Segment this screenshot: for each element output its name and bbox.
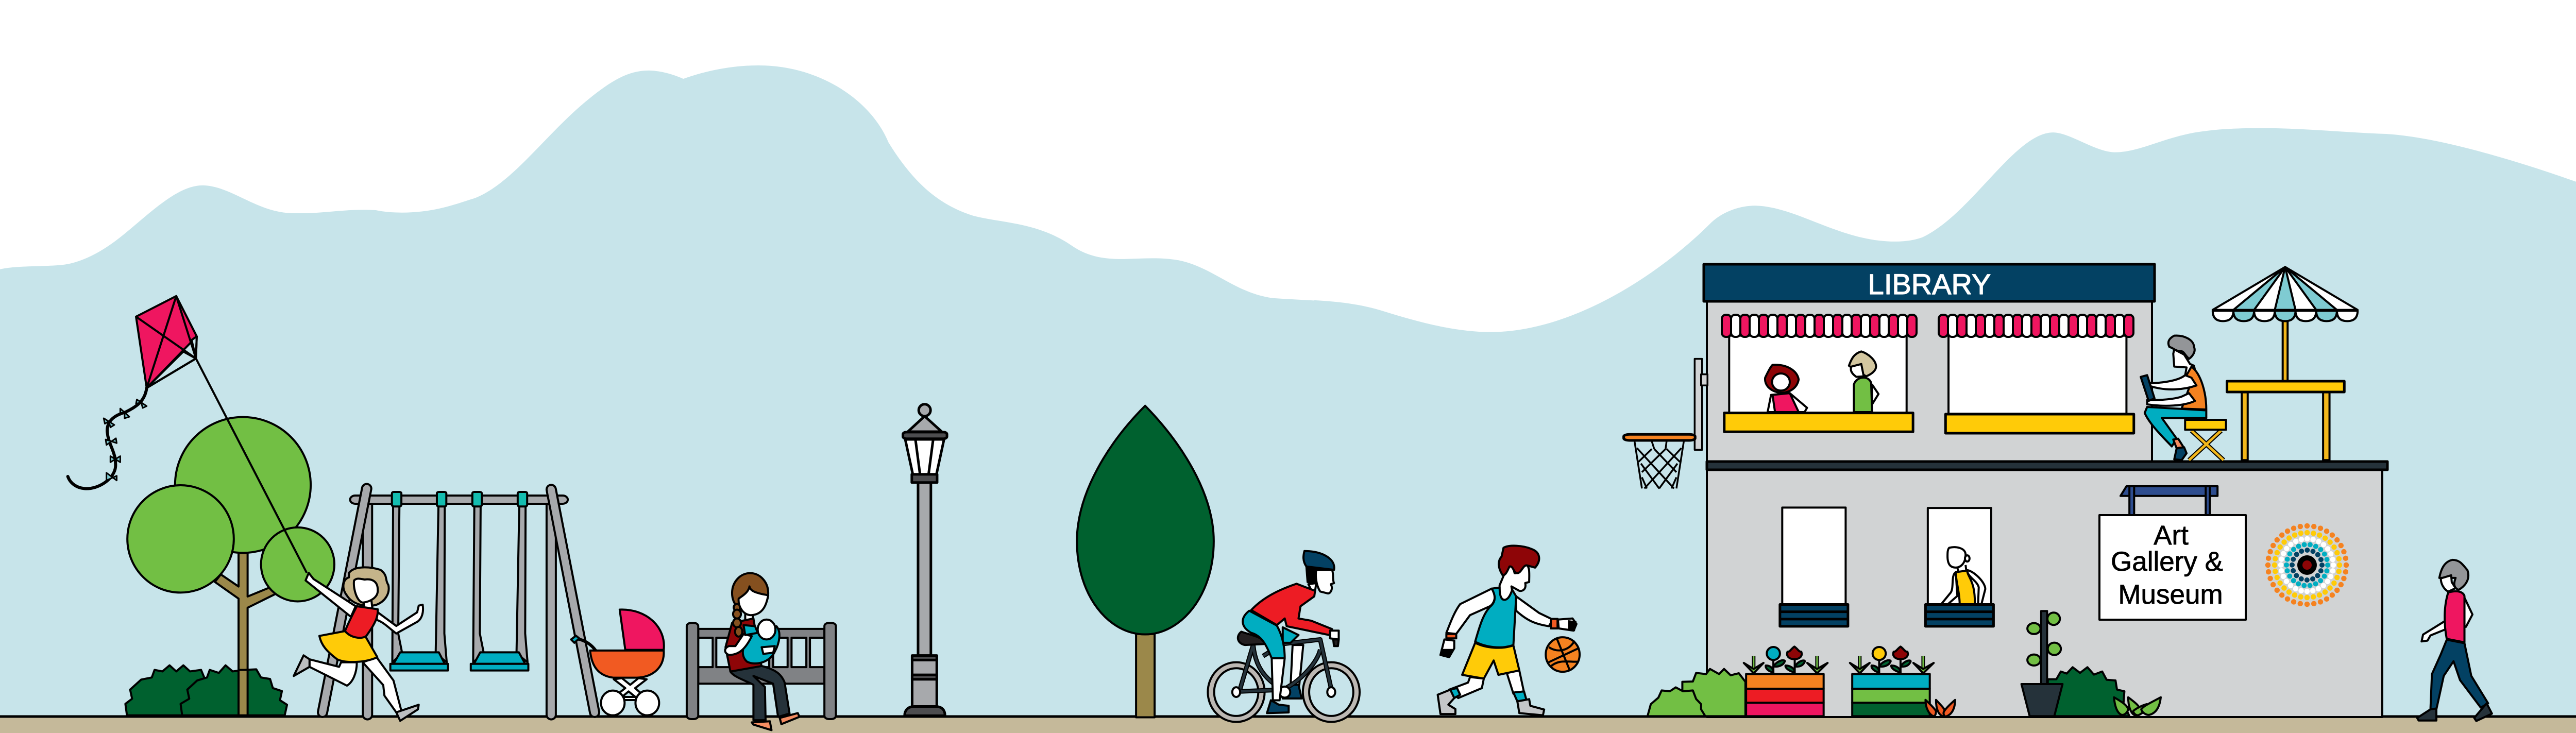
tall teardrop tree (1077, 406, 1214, 718)
small orange plant (1925, 700, 1955, 717)
window sills (1724, 413, 2134, 433)
basketball hoop (1624, 359, 1707, 488)
dot painting artwork (2268, 526, 2346, 604)
kite tail (68, 388, 147, 489)
library windows (1729, 336, 2126, 414)
art gallery sign: Art (2154, 520, 2189, 551)
basketball player (1438, 546, 1577, 715)
swing set (323, 489, 595, 715)
planter box with flowers: cool (1850, 646, 1934, 716)
person in lower window (1941, 547, 1985, 605)
rooftop table (2227, 381, 2344, 460)
cyclist (1208, 551, 1360, 722)
light green bushes (1648, 669, 1745, 716)
rooftop umbrella (2213, 267, 2358, 381)
bicycle frame (1240, 639, 1332, 692)
dark green bush by gallery (2048, 667, 2129, 716)
hoop net (1635, 441, 1684, 488)
baby pram (571, 609, 664, 715)
building: upper floor wall (1707, 299, 2152, 463)
bushes by the tree (125, 666, 287, 715)
street lamp (903, 404, 947, 716)
person walking (2417, 560, 2492, 721)
lower window shutters (1780, 605, 1993, 626)
art gallery sign: Gallery & (2111, 547, 2223, 577)
roof slab (1707, 462, 2387, 470)
window awnings (1722, 315, 2133, 337)
sign hanger (2121, 486, 2217, 515)
basketball (1546, 637, 1580, 672)
small green plant (2114, 697, 2161, 715)
kite string (196, 359, 307, 573)
stool (2185, 420, 2226, 460)
library sign: LIBRARY (1868, 268, 1991, 300)
planter box with flowers: warm (1744, 646, 1827, 716)
kite (68, 296, 307, 573)
potted plant (2022, 611, 2062, 716)
ground (0, 717, 2576, 733)
bicycle wheels (1208, 662, 1360, 722)
person reading on rooftop (2141, 335, 2206, 460)
art gallery sign: Museum (2118, 579, 2223, 610)
library sign (1704, 264, 2155, 301)
park bench (687, 623, 836, 719)
building: lower floor wall (1707, 466, 2382, 717)
girl flying the kite (294, 567, 423, 721)
art gallery sign (2099, 486, 2246, 620)
lower windows (1782, 507, 1991, 605)
tree with round foliage (127, 417, 334, 715)
woman holding a baby (725, 573, 800, 730)
people in library window (1765, 351, 1878, 412)
